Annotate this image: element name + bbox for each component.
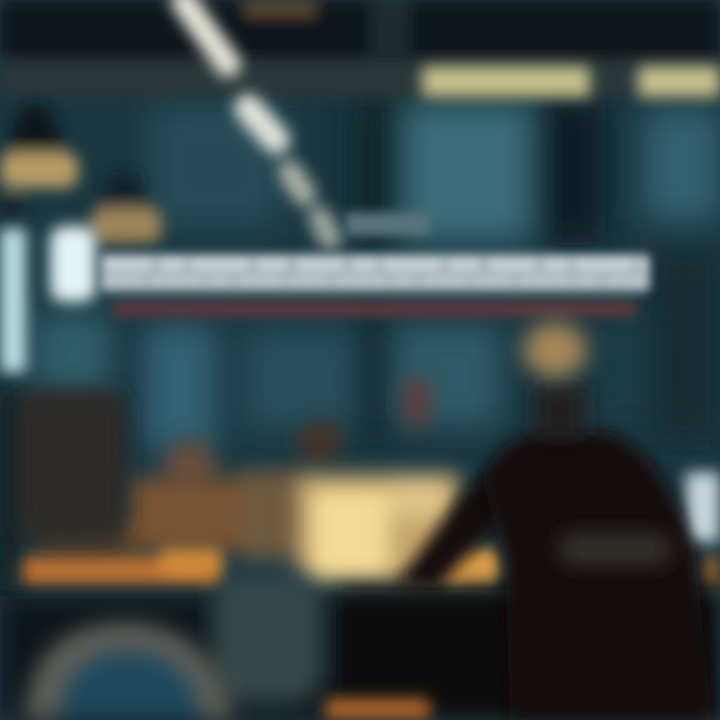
small red accent <box>402 376 432 428</box>
diagonal ceiling lights <box>184 2 330 238</box>
foreground chair <box>25 622 235 720</box>
ceiling <box>0 0 720 96</box>
ceiling light strips <box>422 66 720 97</box>
seated person silhouette <box>398 322 712 720</box>
headline text texture <box>105 258 648 270</box>
person neck <box>535 385 585 435</box>
foreground dark floor <box>0 575 720 720</box>
left foreground figure <box>0 390 125 590</box>
person chair detail <box>560 535 670 563</box>
background figures <box>164 422 342 489</box>
blurred headline band <box>100 212 650 317</box>
person body <box>482 432 712 720</box>
person arm <box>398 465 515 590</box>
person head <box>523 322 587 378</box>
table surface and glow <box>40 470 460 582</box>
orange floor glow <box>325 698 430 720</box>
window wall panels <box>35 95 720 460</box>
right bright screen <box>686 472 720 542</box>
orange table edge <box>18 548 720 588</box>
pendant lamps <box>0 105 162 243</box>
bright window glow left <box>0 226 96 373</box>
